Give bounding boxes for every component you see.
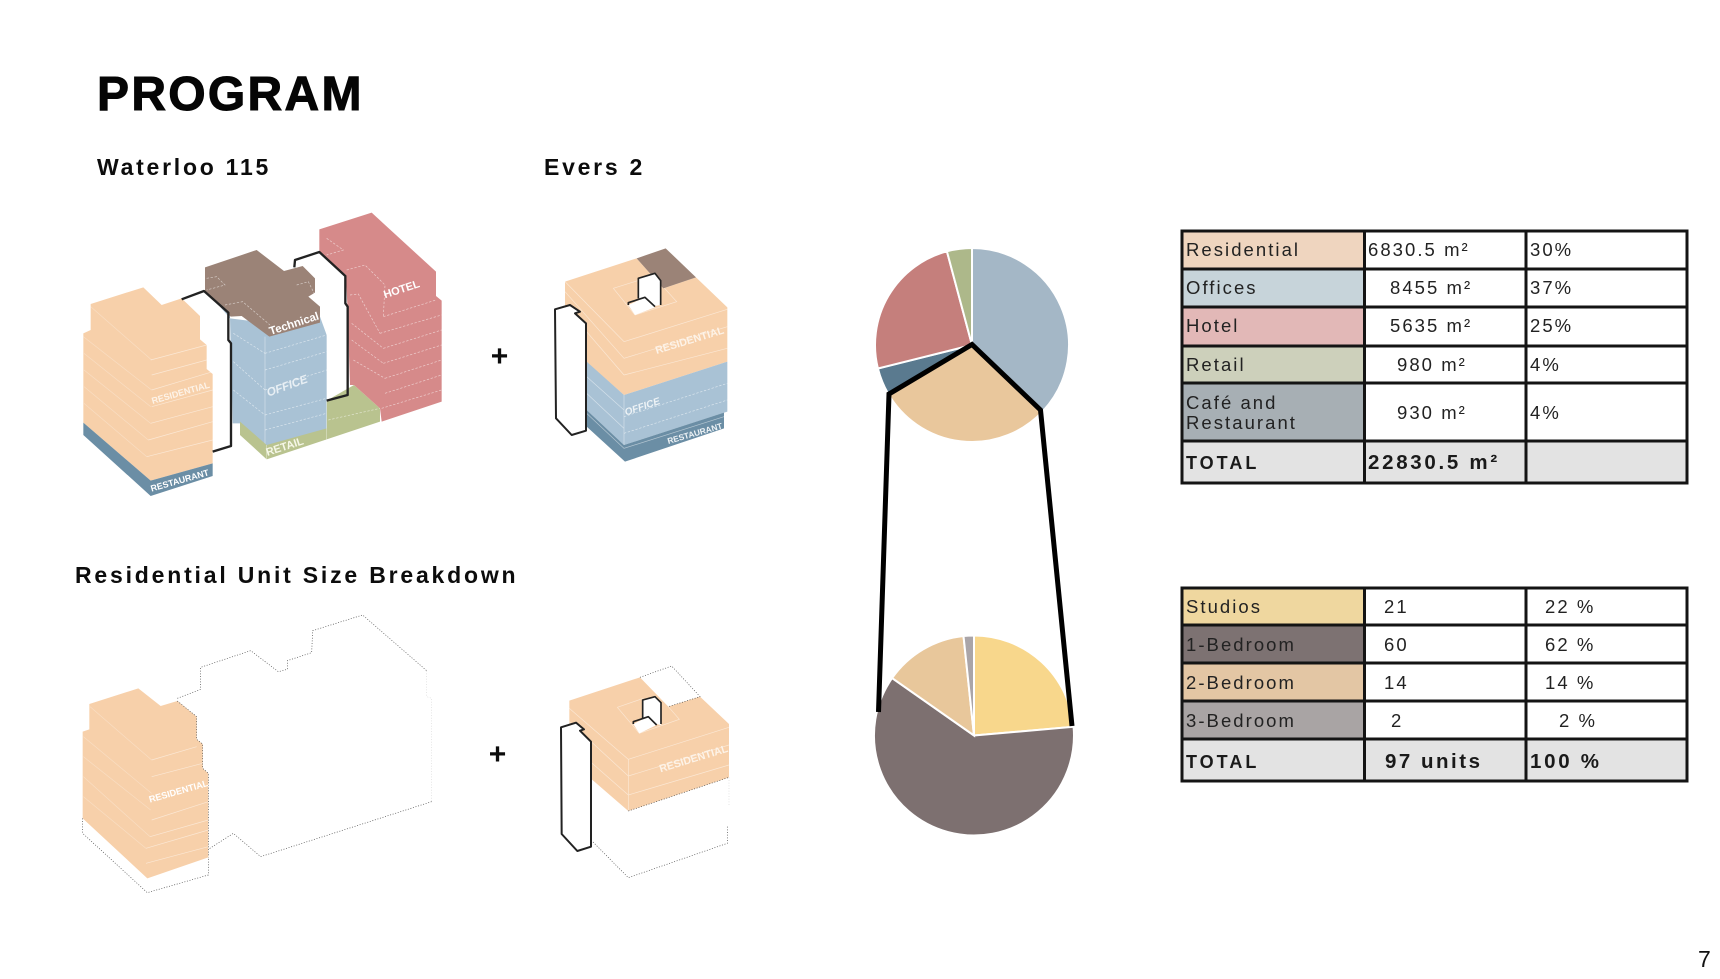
row: residential: 30% — [1530, 239, 1573, 260]
hotel volume — [319, 213, 442, 422]
restaurant volume — [83, 423, 213, 496]
courtyard opening — [628, 273, 661, 315]
row: offices: 37% — [1530, 277, 1573, 298]
label: restaurant: RESTAURANT — [666, 421, 723, 446]
heading: Waterloo 115: Waterloo 115 — [97, 154, 271, 180]
diagram: Waterloo 115 residential only — [83, 615, 432, 893]
slice: 2-bedroom — [892, 636, 974, 736]
label: hotel: HOTEL — [382, 278, 422, 301]
row: total — [1186, 451, 1500, 474]
row: retail: 980 m² — [1397, 354, 1467, 375]
row: hotel: 5635 m² — [1390, 315, 1472, 336]
residential volume — [83, 688, 208, 878]
row: 3-bedroom: 2 — [1391, 710, 1403, 731]
row: 3-bedroom: 2 % — [1559, 710, 1597, 731]
pie chart: unit mix — [874, 635, 1074, 836]
office volume — [206, 280, 327, 453]
label: residential: RESIDENTIAL — [658, 743, 730, 775]
row: offices: Offices — [1186, 277, 1258, 298]
row: studios: 22 % — [1545, 596, 1595, 617]
row: offices: 8455 m² — [1390, 277, 1472, 298]
slice: studios — [974, 636, 1074, 736]
slice: offices — [972, 248, 1069, 411]
row: 3-bedroom — [1186, 710, 1597, 731]
row: hotel — [1186, 315, 1573, 336]
core column — [555, 305, 586, 435]
label: retail: RETAIL — [265, 435, 305, 459]
row: residential: 6830.5 m² — [1368, 239, 1470, 260]
diagram: Waterloo 115 massing — [83, 213, 442, 496]
row: studios: Studios — [1186, 596, 1262, 617]
row: total: TOTAL — [1186, 752, 1259, 772]
plus sign top: + — [491, 340, 508, 373]
grid — [1182, 231, 1687, 483]
residential volume — [565, 258, 727, 395]
core outline left — [182, 291, 231, 452]
row: 2-bedroom — [1186, 672, 1595, 693]
table: program areas — [1181, 230, 1687, 484]
table: unit breakdown — [1181, 587, 1687, 782]
row: cafe and restaurant — [1186, 392, 1561, 433]
row: cafe and restaurant: 4% — [1530, 402, 1561, 423]
label: office: OFFICE — [265, 372, 311, 399]
row: retail: Retail — [1186, 354, 1246, 375]
row fills — [1181, 230, 1687, 484]
label: restaurant: RESTAURANT — [149, 467, 211, 494]
row: hotel: Hotel — [1186, 315, 1239, 336]
office volume — [587, 362, 727, 445]
retail volume — [240, 385, 380, 459]
technical roof — [637, 248, 696, 288]
row: cafe and restaurant: Restaurant — [1186, 412, 1297, 433]
row: residential — [1186, 239, 1573, 260]
core outline right — [294, 252, 348, 401]
row: 2-bedroom: 14 — [1384, 672, 1409, 693]
row: total: 22830.5 m² — [1368, 451, 1500, 474]
row: retail: 4% — [1530, 354, 1561, 375]
row: hotel: 25% — [1530, 315, 1573, 336]
row: total: 100 % — [1530, 750, 1602, 773]
slice: residential — [888, 345, 1043, 442]
row: studios: 21 — [1384, 596, 1409, 617]
page number: 7 — [1698, 946, 1711, 972]
row: residential: Residential — [1186, 239, 1300, 260]
row: total: 97 units — [1385, 750, 1482, 773]
dotted outline — [591, 666, 729, 878]
zoom connector line — [878, 344, 1072, 726]
label: residential: RESIDENTIAL — [654, 324, 726, 357]
diagram: Evers 2 residential only — [561, 666, 730, 878]
courtyard opening — [633, 697, 661, 733]
row: 3-bedroom: 3-Bedroom — [1186, 710, 1296, 731]
label: residential: RESIDENTIAL — [150, 380, 211, 406]
row: cafe and restaurant: Café and — [1186, 392, 1277, 413]
technical volume — [205, 250, 320, 337]
slice: restaurant — [878, 345, 972, 394]
title: PROGRAM — [97, 68, 364, 121]
dotted outline of the rest of the block — [177, 615, 427, 698]
slice: 3-bedroom — [964, 635, 974, 736]
row: 1-bedroom: 1-Bedroom — [1186, 634, 1296, 655]
row: retail — [1186, 354, 1561, 375]
row: 2-bedroom: 14 % — [1545, 672, 1595, 693]
label: residential: RESIDENTIAL — [148, 778, 210, 805]
slice: hotel — [875, 251, 972, 368]
pie chart: program share — [875, 248, 1069, 442]
label: technical: Technical — [268, 311, 320, 338]
plus sign bottom: + — [489, 738, 506, 771]
row: 1-bedroom: 62 % — [1545, 634, 1595, 655]
label: office: OFFICE — [623, 396, 662, 419]
row: total — [1186, 750, 1602, 773]
restaurant volume — [587, 410, 724, 462]
slice: retail — [947, 248, 972, 345]
row: offices — [1186, 277, 1573, 298]
heading: residential unit size breakdown: Residential Unit Size Breakdown — [75, 562, 518, 588]
row: studios — [1186, 596, 1595, 617]
row: 1-bedroom: 60 — [1384, 634, 1409, 655]
row: 1-bedroom — [1186, 634, 1595, 655]
core column — [561, 723, 591, 851]
row fills — [1181, 587, 1687, 782]
slice: 1-bedroom — [874, 678, 1074, 836]
row: total: TOTAL — [1186, 453, 1259, 473]
row: 2-bedroom: 2-Bedroom — [1186, 672, 1296, 693]
grid — [1182, 588, 1687, 781]
residential volume — [569, 677, 729, 811]
residential volume — [83, 287, 213, 481]
row: cafe and restaurant: 930 m² — [1397, 402, 1467, 423]
diagram: Evers 2 massing — [555, 248, 727, 462]
heading: Evers 2: Evers 2 — [544, 154, 645, 180]
